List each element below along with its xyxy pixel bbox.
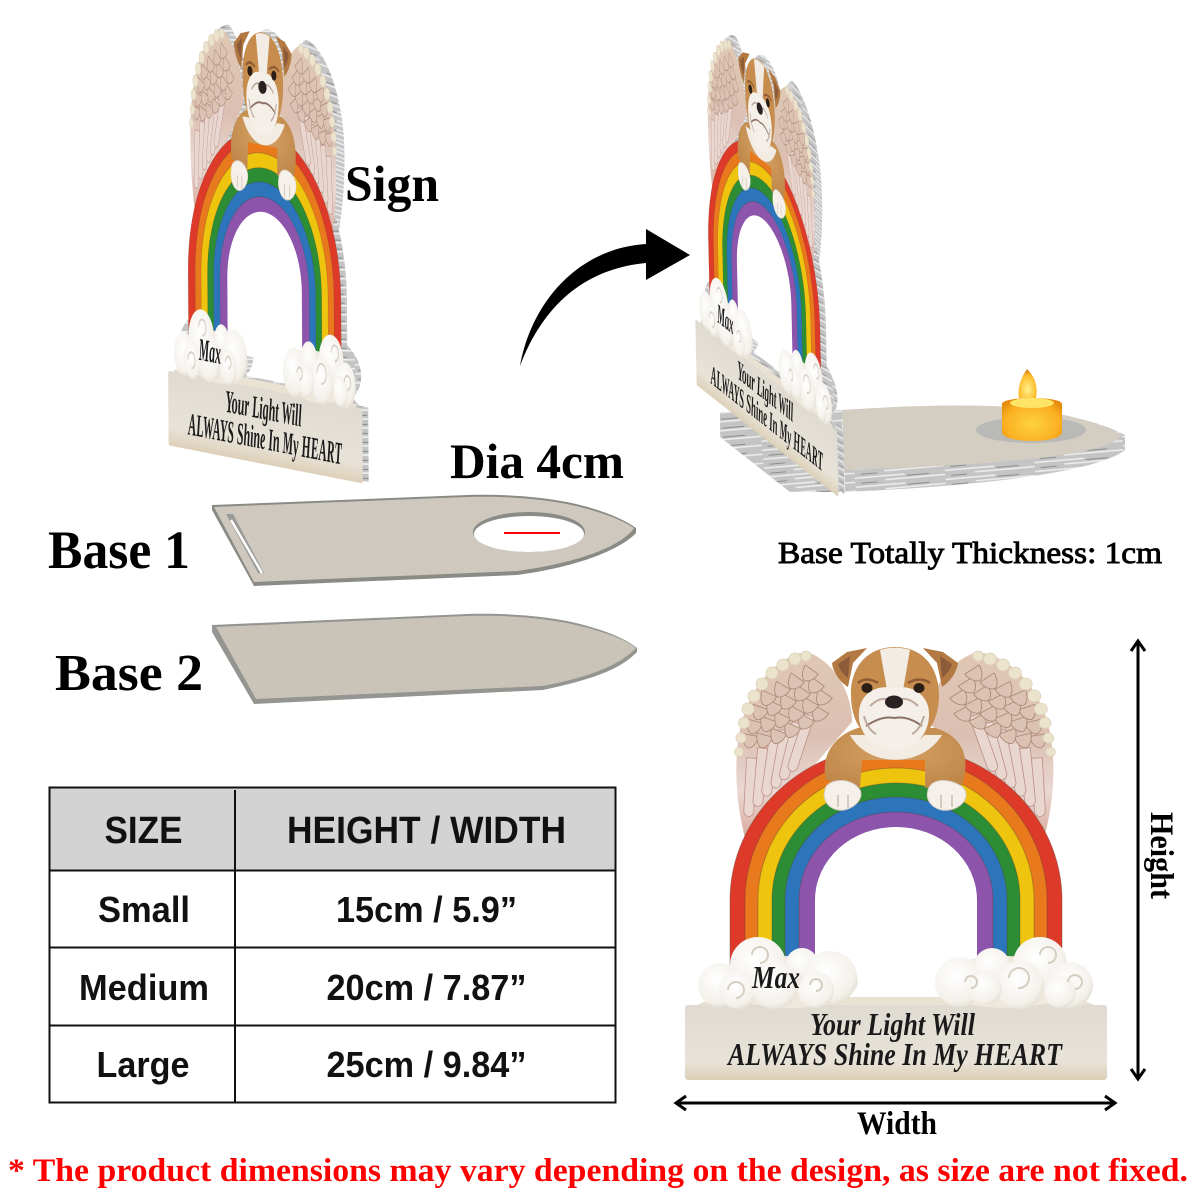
tea light candle: [1002, 369, 1062, 441]
row medium: Medium: [79, 967, 209, 1008]
label: Height: Height: [1143, 812, 1179, 899]
base plate 2: [212, 614, 637, 704]
base plate top: [842, 406, 1122, 470]
size table: 15cm / 5.9”: [336, 889, 517, 930]
front view of sign: ALWAYS Shine In My HEART: [726, 1036, 1063, 1072]
sign figurine, angled view: Max: [198, 333, 221, 372]
table header row: [50, 788, 615, 870]
assembled sign with candle: [688, 1, 1125, 497]
label: Dia 4cm: Dia 4cm: [450, 433, 624, 489]
label: Base 2: Base 2: [55, 645, 203, 702]
label: Base 1: Base 1: [48, 520, 190, 580]
size table: HEIGHT / WIDTH: [287, 810, 566, 852]
candle hole: [976, 417, 1086, 443]
base block behind sign: [720, 410, 842, 492]
height arrow: [1131, 641, 1145, 1079]
assembled sign with candle: Max: [717, 296, 734, 341]
row small: Small: [98, 889, 190, 930]
red diameter line: [504, 532, 560, 534]
label: Base Totally Thickness: Base Totally Thickness: 1cm: [778, 535, 1162, 570]
front view of sign: [685, 647, 1107, 1080]
size table: 25cm / 9.84”: [326, 1044, 526, 1085]
sign figurine, angled view: ALWAYS Shine In My HEART: [187, 407, 343, 472]
label: Sign: Sign: [345, 157, 439, 213]
sign figurine, angled view: [166, 11, 369, 483]
size table: [49, 788, 616, 1103]
label: Width: Width: [857, 1106, 937, 1142]
size table: 20cm / 7.87”: [326, 967, 526, 1008]
assembled sign with candle: Your Light Will: [737, 353, 794, 429]
footnote: * The product dimensions may vary depending on the design, as size are not fixed.: [8, 1153, 1188, 1189]
curved arrow: [520, 229, 690, 366]
sign figurine, angled view: Your Light Will: [226, 385, 302, 434]
assembled sign with candle: ALWAYS Shine In My HEART: [710, 357, 824, 479]
base plate 1 with hole and slot: [212, 495, 636, 586]
row large: Large: [96, 1044, 190, 1085]
header text: SIZE: [104, 810, 182, 852]
front view of sign: Your Light Will: [810, 1006, 975, 1042]
base plate with edge: [842, 406, 1125, 492]
front view of sign: Max: [751, 959, 800, 995]
width arrow: [676, 1096, 1115, 1110]
